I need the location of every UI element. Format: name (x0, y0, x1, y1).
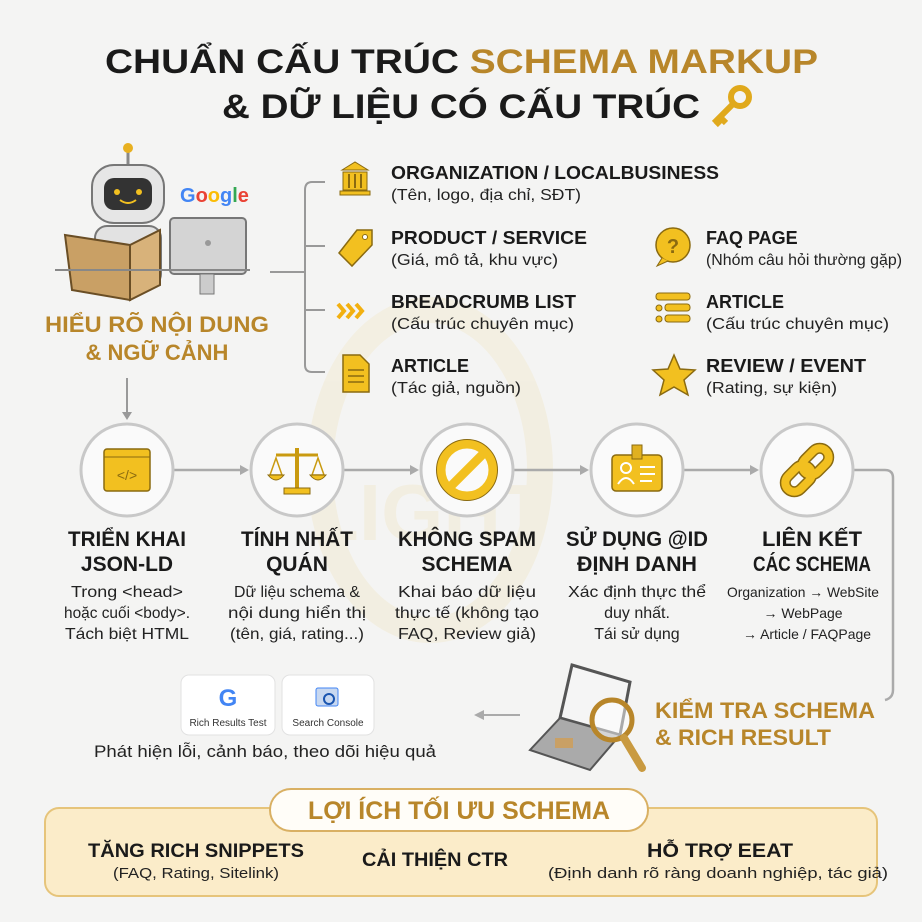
heading: kiểm tra schema: & RICH RESULT (655, 725, 832, 750)
benefit: eeat: HỖ TRỢ EEAT (647, 840, 793, 862)
step 3: no spam: KHÔNG SPAM (398, 527, 536, 551)
item: review (653, 355, 866, 397)
step 2: consistency: Dữ liệu schema & (234, 584, 360, 601)
heading: kiểm tra schema: KIỂM TRA SCHEMA (655, 698, 875, 723)
step 4: @id: ĐỊNH DANH (577, 553, 697, 576)
step 1: json-ld (64, 424, 190, 643)
schema types list (338, 162, 902, 397)
item: faq (656, 228, 902, 269)
panel: benefits (45, 789, 888, 896)
icon: key (714, 88, 749, 125)
benefit: ctr: CẢI THIỆN CTR (362, 849, 508, 871)
step 3: no spam (395, 424, 539, 643)
step 4: @id: Tái sử dụng (594, 626, 680, 643)
step 2: consistency: QUÁN (266, 553, 328, 576)
step 2: consistency: (tên, giá, rating...) (230, 626, 364, 643)
robot illustration (55, 143, 250, 300)
step 5: link schemas (727, 424, 879, 642)
benefit: eeat (548, 840, 888, 882)
item: article: (Tác giả, nguồn) (391, 380, 521, 397)
heading: hiểu rõ nội dung (45, 312, 269, 365)
step 5: link schemas: Organization → WebSite (727, 584, 879, 600)
item: product: (Giá, mô tả, khu vực) (391, 252, 558, 269)
heading: lợi ích: LỢI ÍCH TỐI ƯU SCHEMA (308, 795, 610, 825)
step 2: consistency: nội dung hiển thị (228, 604, 366, 622)
benefit: rich snippets (88, 840, 304, 882)
item: breadcrumb (338, 292, 576, 333)
item: article: ARTICLE (391, 356, 469, 376)
tool: rich results test: Rich Results Test (189, 718, 267, 729)
tool: search console (282, 675, 374, 735)
heading: hiểu rõ nội dung: & NGỮ CẢNH (86, 340, 228, 365)
benefit: rich snippets: TĂNG RICH SNIPPETS (88, 840, 304, 862)
benefit: eeat: (Định danh rõ ràng doanh nghiệp, tác giả) (548, 865, 888, 882)
title: & DỮ LIỆU CÓ CẤU TRÚC (222, 88, 700, 126)
item: breadcrumb: BREADCRUMB LIST (391, 292, 576, 312)
step 1: json-ld: </> (117, 467, 137, 483)
item: organization (340, 162, 719, 204)
step 5: link schemas: → WebPage (763, 605, 843, 621)
step 1: json-ld: TRIỂN KHAI (68, 528, 186, 551)
step 3: no spam: thực tế (không tạo (395, 605, 539, 622)
step 2: consistency (228, 424, 366, 643)
step 5: link schemas: LIÊN KẾT (762, 527, 862, 551)
arrow down (122, 378, 132, 420)
tool: rich results test: G (219, 685, 237, 712)
step 5: link schemas: CÁC SCHEMA (753, 553, 871, 576)
step 1: json-ld: JSON-LD (81, 553, 173, 576)
step 3: no spam: SCHEMA (421, 553, 513, 576)
step 3: no spam: Khai báo dữ liệu (398, 584, 536, 601)
heading: lợi ích (270, 789, 648, 831)
step 5: link schemas: → Article / FAQPage (743, 626, 871, 642)
item: breadcrumb: (Cấu trúc chuyên mục) (391, 316, 574, 333)
item: article list: (Cấu trúc chuyên mục) (706, 316, 889, 333)
item: faq: (Nhóm câu hỏi thường gặp) (706, 252, 902, 269)
item: product (339, 228, 587, 269)
title: CHUẨN CẤU TRÚC SCHEMA MARKUP (105, 43, 818, 81)
item: faq: FAQ PAGE (706, 228, 798, 248)
item: product: PRODUCT / SERVICE (391, 228, 587, 248)
step 2: consistency: TÍNH NHẤT (241, 528, 353, 551)
tool: rich results test (181, 675, 275, 735)
step 4: @id: SỬ DỤNG @ID (566, 527, 708, 551)
watermark: LIGHT (310, 468, 550, 557)
item: article list: ARTICLE (706, 292, 784, 312)
item: organization: ORGANIZATION / LOCALBUSINESS (391, 163, 719, 183)
item: faq: ? (667, 236, 679, 258)
bracket connector (270, 182, 325, 372)
title (105, 43, 818, 126)
heading: hiểu rõ nội dung: HIỂU RÕ NỘI DUNG (45, 312, 269, 337)
item: organization: (Tên, logo, địa chỉ, SĐT) (391, 187, 581, 204)
watermark (310, 310, 550, 630)
heading: kiểm tra schema (655, 698, 875, 750)
step 3: no spam: FAQ, Review giả) (398, 626, 536, 643)
item: review: REVIEW / EVENT (706, 356, 866, 376)
robot illustration: Google (180, 185, 249, 207)
step 1: json-ld: Tách biệt HTML (65, 626, 189, 643)
arrow left (474, 710, 520, 720)
item: article (343, 355, 521, 397)
item: article list (656, 292, 889, 333)
step 4: @id (566, 424, 708, 643)
item: review: (Rating, sự kiện) (706, 380, 837, 397)
step 1: json-ld: hoặc cuối <body>. (64, 605, 190, 622)
benefit: rich snippets: (FAQ, Rating, Sitelink) (113, 865, 279, 882)
step 1: json-ld: Trong <head> (71, 584, 183, 601)
step 4: @id: duy nhất. (604, 605, 670, 622)
tool: search console: Search Console (292, 718, 364, 729)
text: tools description: Phát hiện lỗi, cảnh báo, theo dõi hiệu quả (94, 742, 437, 761)
step 4: @id: Xác định thực thể (568, 583, 706, 601)
laptop with magnifier (530, 665, 642, 770)
process arrows (174, 465, 893, 700)
